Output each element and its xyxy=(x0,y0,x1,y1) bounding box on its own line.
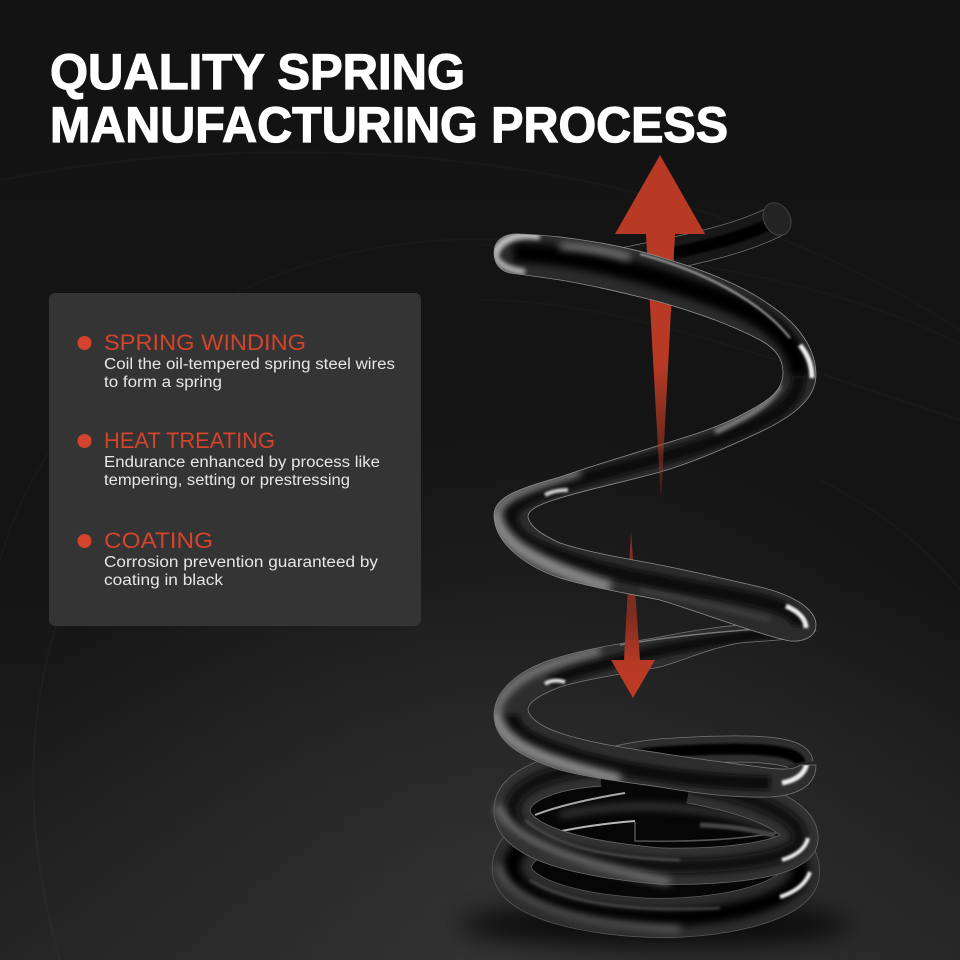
step: spring winding xyxy=(78,330,395,391)
step: heat treating: HEAT TREATING xyxy=(104,428,275,453)
coil highlights xyxy=(545,254,812,628)
step: coating: COATING xyxy=(104,528,213,553)
arrow: down xyxy=(611,531,655,698)
step: coating xyxy=(78,528,378,589)
coil: third turn xyxy=(494,621,816,797)
middle coil xyxy=(498,768,808,882)
step: heat treating xyxy=(78,428,380,489)
coil: upper and middle turns xyxy=(494,234,816,641)
coil: front crossing over arrow xyxy=(600,242,720,320)
back of top ring xyxy=(600,749,800,764)
step: coating: coating in black xyxy=(104,572,223,589)
spring shadow xyxy=(460,903,850,947)
title xyxy=(50,44,728,153)
step: coating: Corrosion prevention guaranteed by xyxy=(104,554,378,571)
step: spring winding: SPRING WINDING xyxy=(104,330,306,355)
coil: top end xyxy=(620,198,796,264)
coil base fill xyxy=(515,775,800,915)
step: spring winding: to form a spring xyxy=(104,374,222,391)
icon: wire cut end xyxy=(758,198,796,240)
bottom coil xyxy=(498,828,810,929)
title: MANUFACTURING PROCESS xyxy=(50,97,728,153)
spring lower coils xyxy=(494,621,816,929)
step: heat treating: Endurance enhanced by process like xyxy=(104,454,380,471)
step: heat treating: tempering, setting or prestressing xyxy=(104,472,350,489)
step: spring winding: Coil the oil-tempered spring steel wires xyxy=(104,356,395,373)
panel: manufacturing steps xyxy=(49,293,421,626)
arrow: up xyxy=(615,155,705,502)
coil interior xyxy=(523,780,787,859)
title: QUALITY SPRING xyxy=(50,44,465,100)
